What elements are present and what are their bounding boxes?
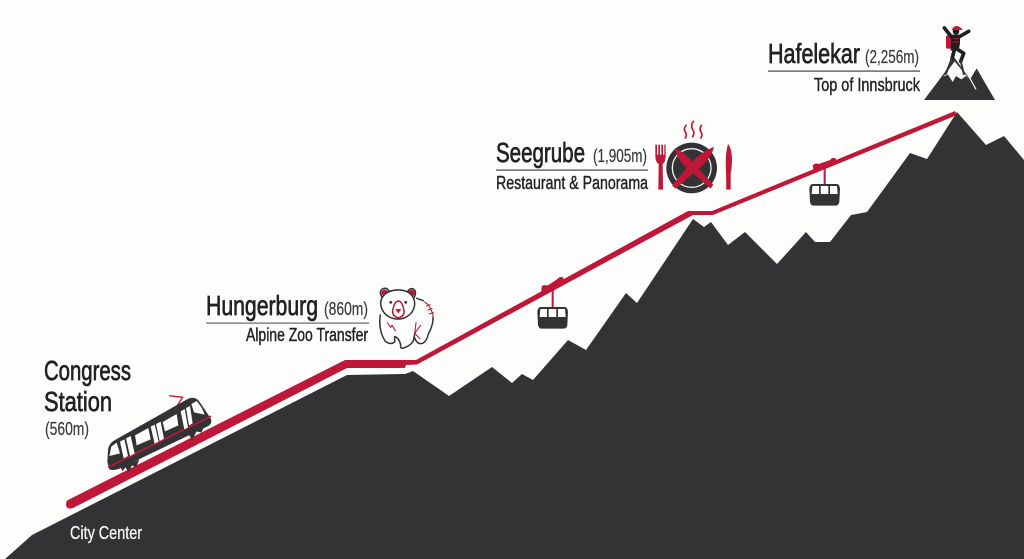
plate ring <box>672 149 711 187</box>
cabin <box>809 184 840 206</box>
icon: bear <box>380 288 433 348</box>
station name line two: Station <box>44 386 112 417</box>
hanger <box>550 288 556 307</box>
heading: Hungerburg <box>206 290 369 345</box>
carriage <box>541 277 563 292</box>
icon: funicular train <box>107 396 211 472</box>
rule <box>768 70 920 72</box>
subtitle: Restaurant & Panorama <box>496 173 649 193</box>
elevation: (2,256m) <box>865 47 919 67</box>
station name: Hafelekar <box>768 38 860 69</box>
station name: Hungerburg <box>206 290 318 321</box>
rule <box>496 170 648 171</box>
heading: Hafelekar <box>768 38 921 95</box>
nose <box>396 309 401 313</box>
cap <box>952 26 963 30</box>
station name: Seegrube <box>496 137 585 168</box>
small mountain <box>924 57 995 100</box>
steam <box>684 121 702 138</box>
station name line one: Congress <box>44 355 131 386</box>
inner ears <box>381 289 415 296</box>
crossed knives <box>672 147 714 189</box>
train body <box>107 398 211 470</box>
head <box>381 290 415 319</box>
legs to peak <box>945 58 964 75</box>
icon: gondola 2 <box>809 158 840 206</box>
snow cap <box>943 61 969 82</box>
pantograph <box>169 396 183 405</box>
muzzle <box>393 301 404 318</box>
knife <box>726 144 732 190</box>
windows and doors <box>109 401 205 458</box>
bogies <box>121 425 205 472</box>
rule <box>206 322 369 324</box>
icon: plate with cutlery <box>655 121 732 193</box>
jacket stripes <box>953 39 959 42</box>
body <box>380 298 433 348</box>
ridge crack <box>969 76 976 89</box>
eyes <box>391 298 406 306</box>
fur marks <box>387 302 433 339</box>
carriage <box>813 158 836 170</box>
elevation: (560m) <box>45 419 89 439</box>
subtitle: Alpine Zoo Transfer <box>246 325 368 345</box>
head <box>953 28 959 35</box>
icon: gondola 1 <box>537 277 568 329</box>
backpack <box>946 35 954 49</box>
ears <box>380 288 416 297</box>
torso <box>951 35 960 51</box>
elevation: (860m) <box>324 299 368 319</box>
label: City Center: City Center <box>70 523 142 543</box>
stripe <box>108 416 211 467</box>
red route line <box>66 111 957 509</box>
heading: Congress Station <box>44 355 131 439</box>
icon: climber on summit <box>924 26 995 100</box>
elevation: (1,905m) <box>593 146 647 166</box>
hanger <box>822 165 828 184</box>
mountain silhouette <box>5 112 1024 559</box>
plate <box>666 143 717 193</box>
cabin <box>537 307 568 329</box>
heading: Seegrube <box>496 137 649 193</box>
subtitle: Top of Innsbruck <box>814 75 921 95</box>
fork <box>655 145 666 190</box>
climber figure <box>944 28 969 61</box>
cabin windows <box>540 309 566 317</box>
cabin windows <box>812 186 838 194</box>
